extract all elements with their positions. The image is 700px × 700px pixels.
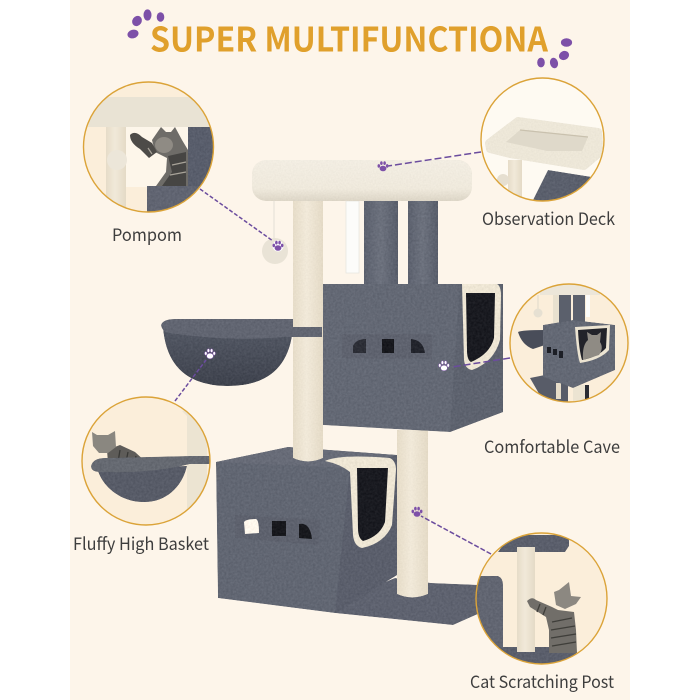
sisal post	[182, 408, 207, 510]
icon: paw prints right of title	[537, 38, 572, 69]
hanging basket	[161, 319, 322, 386]
cat tree product	[161, 160, 503, 625]
label: Pompom: Pompom	[112, 221, 182, 246]
sisal post	[517, 547, 535, 652]
label: Fluffy High Basket: Fluffy High Basket	[73, 530, 210, 555]
base	[498, 647, 576, 664]
circle backdrop	[510, 292, 628, 401]
gray box corner	[532, 170, 592, 202]
lower sisal post	[397, 430, 428, 598]
pompom toy	[262, 201, 288, 264]
cave opening with cat	[575, 325, 610, 363]
cat	[92, 431, 141, 458]
arrow: pompom connector	[200, 189, 284, 252]
kitten	[527, 582, 581, 653]
circle border	[481, 78, 604, 201]
label: Observation Deck: Observation Deck	[482, 205, 616, 230]
panel: scratching post circle	[475, 532, 608, 665]
gray wall	[188, 127, 213, 187]
label: Comfortable Cave: Comfortable Cave	[484, 433, 620, 458]
mini basket	[518, 330, 545, 349]
main sisal post	[293, 200, 323, 462]
mini window holes	[547, 347, 563, 358]
arrow: cave connector	[438, 358, 510, 371]
top observation platform	[252, 160, 472, 201]
gray support posts	[364, 199, 438, 285]
sisal post overlap over basket	[293, 337, 323, 377]
icon: paw prints left of title	[126, 9, 164, 40]
circle border	[84, 82, 214, 212]
circle border	[476, 533, 607, 664]
deck bed	[489, 121, 599, 166]
label: Cat Scratching Post: Cat Scratching Post	[470, 668, 615, 693]
circle backdrop	[480, 77, 605, 202]
title: SUPER MULTIFUNCTIONA	[150, 12, 548, 62]
panel: fluffy basket circle	[81, 396, 211, 526]
sisal post	[106, 127, 126, 213]
panel: pompom circle	[83, 81, 214, 214]
support post	[508, 160, 522, 196]
cream backdrop behind cat	[126, 127, 188, 187]
top gray platform	[498, 535, 569, 552]
arrow: observation deck connector	[378, 152, 481, 171]
base platform	[335, 578, 480, 625]
mini condo box	[543, 320, 615, 388]
gray box	[147, 186, 192, 212]
top platform	[540, 284, 600, 295]
lower condo box	[216, 447, 397, 613]
circle backdrop	[84, 83, 188, 211]
shelf	[88, 97, 212, 127]
arrow: scratching post connector	[412, 507, 491, 554]
circle backdrop	[481, 534, 606, 652]
left gray box	[476, 576, 503, 647]
basket rim	[91, 456, 210, 472]
hanging ball	[497, 174, 509, 186]
panel: observation deck circle	[480, 77, 605, 202]
mini base and lower post	[530, 375, 589, 402]
cream background panel	[70, 0, 630, 700]
panel: comfortable cave circle	[509, 283, 630, 405]
deck inner	[506, 130, 588, 151]
basket bowl	[97, 466, 187, 502]
circle border	[82, 397, 210, 525]
arrow: basket connector	[175, 349, 216, 401]
mini pompom	[534, 295, 542, 318]
circle border	[510, 284, 628, 402]
white ramp strip	[346, 201, 359, 273]
cat	[130, 127, 188, 186]
sisal and gray posts	[553, 295, 590, 324]
hanging ball	[107, 150, 127, 170]
upper condo box	[323, 284, 503, 432]
circle backdrop	[81, 396, 211, 526]
deck inner back edge	[520, 130, 588, 137]
